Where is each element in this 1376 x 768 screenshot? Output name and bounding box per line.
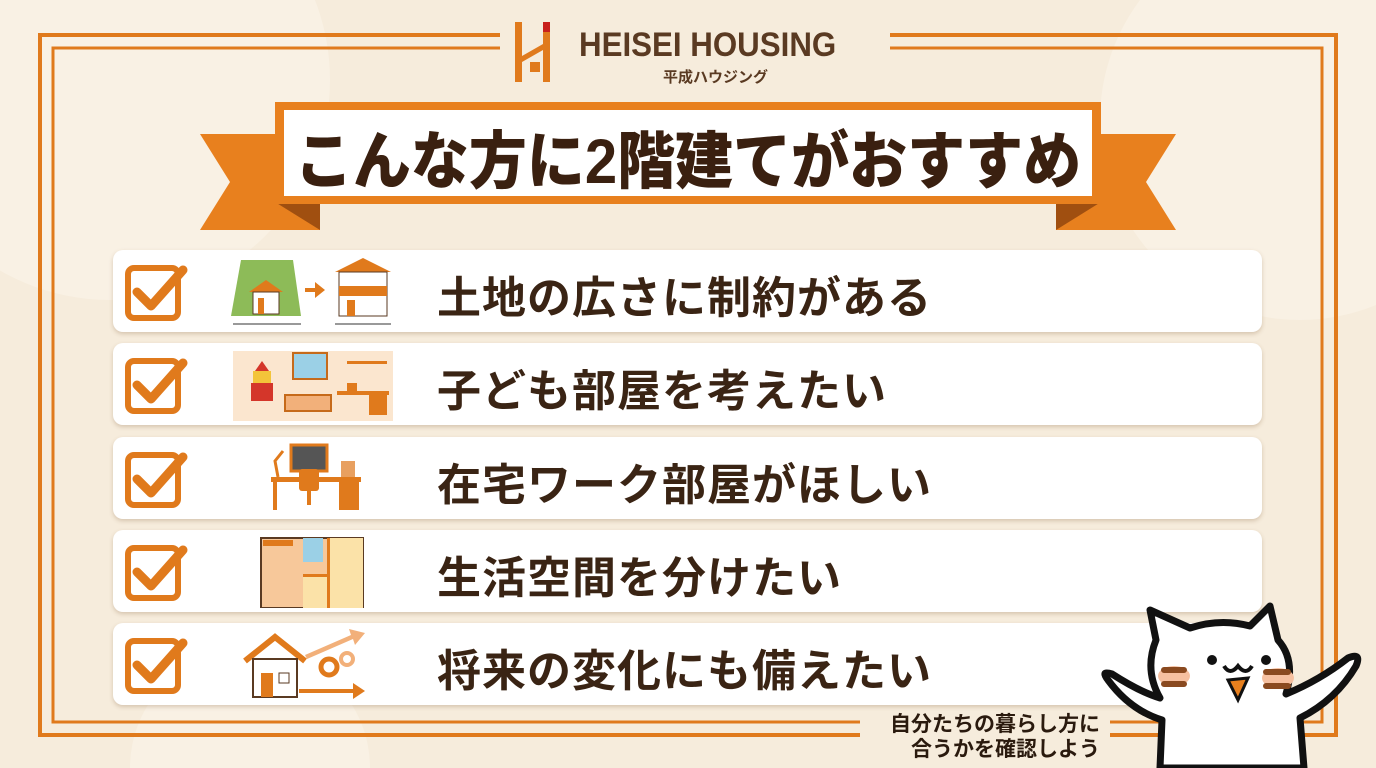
- icon: work desk: [271, 444, 361, 510]
- logo: HEISEI HOUSING: [579, 26, 836, 64]
- icon: land to two-story house: [231, 258, 391, 324]
- icon: kids room: [233, 351, 393, 421]
- icon: floor plan: [260, 537, 364, 608]
- card 2: [113, 343, 1262, 425]
- text: 土地の広さに制約がある: [437, 274, 932, 323]
- footer callout text: 合うかを確認しよう: [911, 738, 1100, 761]
- title banner: こんな方に2階建てがおすすめ: [295, 127, 1081, 197]
- logo: [515, 22, 836, 86]
- text: 将来の変化にも備えたい: [437, 647, 932, 696]
- text: 生活空間を分けたい: [437, 554, 842, 603]
- logo: 平成ハウジング: [663, 69, 768, 86]
- text: 在宅ワーク部屋がほしい: [437, 461, 932, 510]
- card 1: [113, 250, 1262, 332]
- cat mascot: [1101, 602, 1362, 768]
- footer callout text: [890, 712, 1100, 761]
- card 5: [113, 623, 1262, 705]
- title banner: [200, 102, 1176, 230]
- footer callout text: 自分たちの暮らし方に: [890, 713, 1100, 736]
- text: 子ども部屋を考えたい: [437, 367, 887, 416]
- card 4: [113, 530, 1262, 612]
- icon: house with growth arrows: [243, 629, 365, 699]
- card 3: [113, 437, 1262, 519]
